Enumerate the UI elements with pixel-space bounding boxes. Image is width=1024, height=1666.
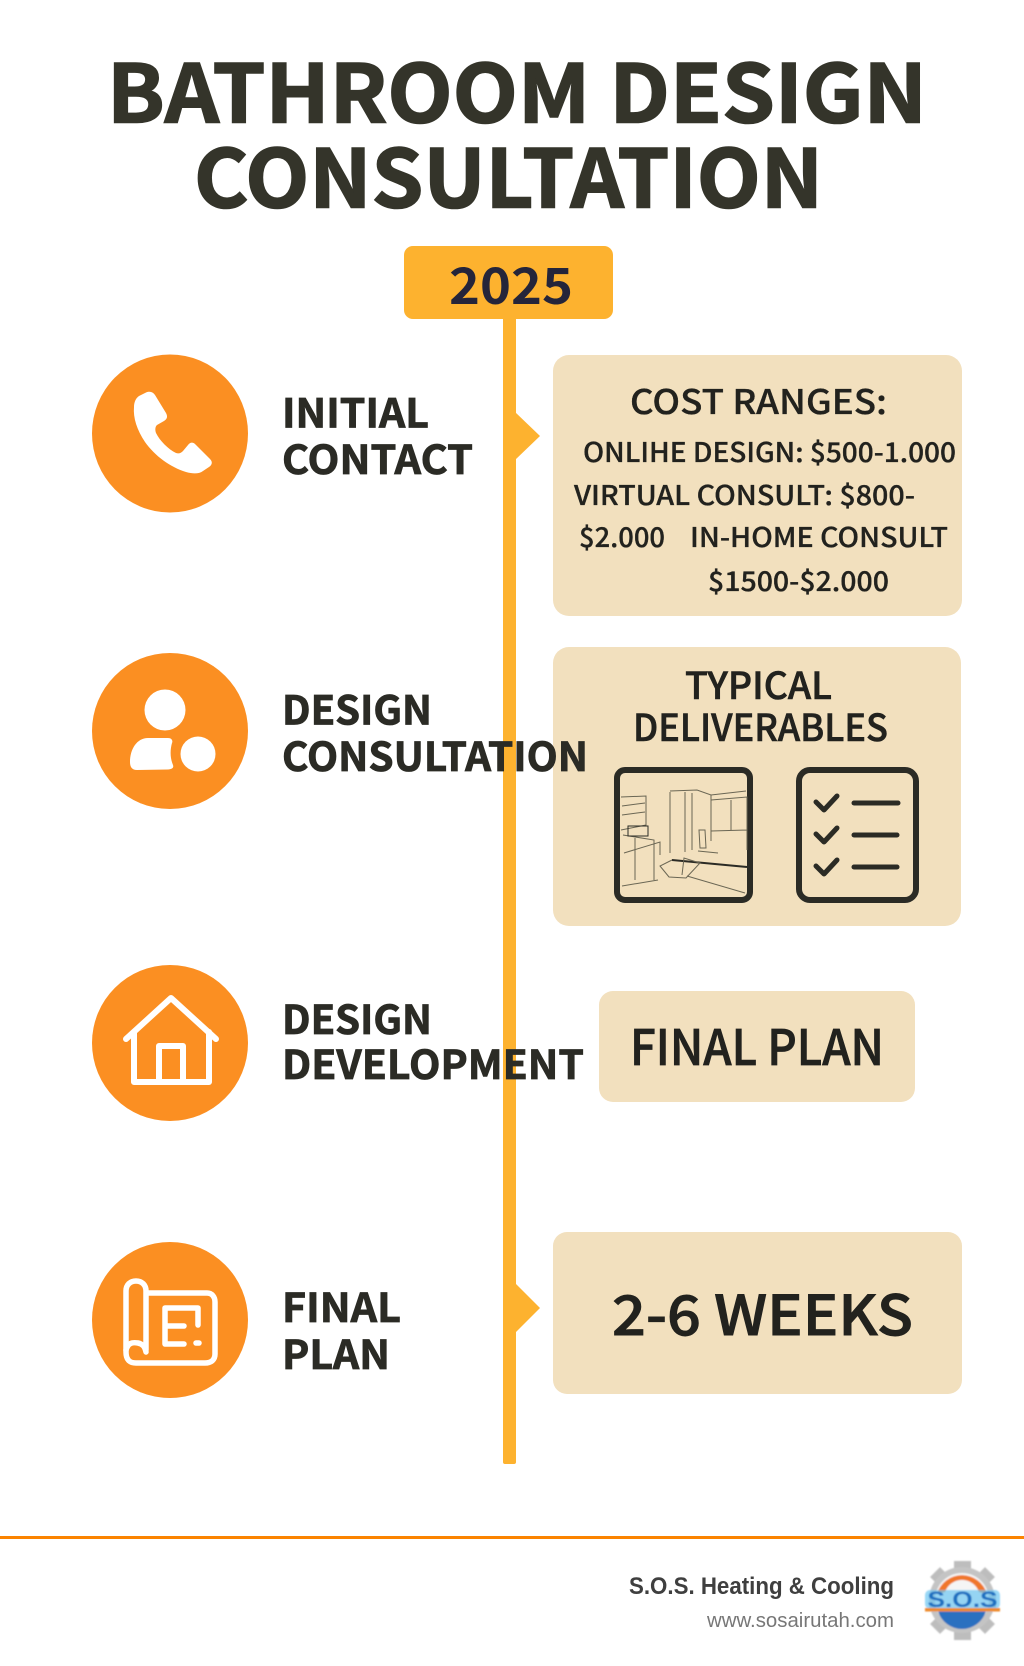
heading: typical deliverables: [633, 656, 888, 752]
label: design development: DEVELOPMENT: [282, 1033, 584, 1091]
panel: cost ranges: [553, 355, 962, 616]
label: design development: DESIGN: [282, 988, 432, 1046]
icon: bathroom sketch: [617, 770, 750, 900]
icon: S.O.S logo: [925, 1561, 1000, 1640]
label: design development: [282, 988, 584, 1091]
label: design consultation: DESIGN: [282, 678, 432, 736]
label: final plan: [282, 1276, 401, 1381]
icon: house: [92, 965, 248, 1121]
icon: phone: [92, 354, 248, 512]
year badge: [404, 246, 613, 319]
footer text: [629, 1573, 894, 1632]
title: [107, 30, 927, 232]
heading: typical deliverables: DELIVERABLES: [633, 698, 888, 752]
icon: checklist: [799, 770, 916, 900]
label: initial contact: INITIAL: [282, 382, 429, 440]
label: final plan: FINAL: [282, 1276, 401, 1334]
label: design consultation: [282, 678, 588, 783]
heading: cost ranges: COST RANGES:: [630, 375, 887, 424]
text: price list: [573, 431, 956, 599]
label: final plan: PLAN: [282, 1323, 390, 1381]
text: price list: $2.000: [579, 516, 665, 555]
icon: blueprint: [92, 1242, 248, 1398]
footer rule: [0, 1536, 1024, 1539]
text: price list: $1500-$2.000: [708, 560, 889, 599]
text: price list: VIRTUAL CONSULT: $800-: [573, 474, 915, 513]
text: price list: ONLIHE DESIGN: $500-1.000: [583, 431, 956, 470]
icon: S.O.S logo: S.O.S: [928, 1587, 998, 1612]
label: initial contact: [282, 382, 473, 486]
panel: typical deliverables: [553, 647, 961, 926]
panel: final plan: [599, 991, 915, 1102]
label: design consultation: CONSULTATION: [282, 725, 588, 783]
panel: timeframe: 2-6 WEEKS: [612, 1271, 913, 1351]
footer text: www.sosairutah.com: [706, 1610, 894, 1632]
heading: typical deliverables: TYPICAL: [685, 656, 832, 710]
timeline pointer: duration: [515, 1283, 540, 1333]
year badge: 2025: [449, 247, 573, 319]
icon: people: [92, 653, 248, 809]
title: BATHROOM DESIGN: [107, 30, 927, 146]
timeline vertical line: [503, 310, 516, 1464]
text: price list: IN-HOME CONSULT: [690, 516, 948, 555]
timeline pointer: cost ranges: [515, 412, 540, 460]
footer text: S.O.S. Heating & Cooling: [629, 1573, 894, 1600]
panel: timeframe: [553, 1232, 962, 1394]
title: CONSULTATION: [194, 116, 823, 232]
label: initial contact: CONTACT: [282, 428, 473, 486]
panel: final plan: FINAL PLAN: [630, 1009, 884, 1080]
